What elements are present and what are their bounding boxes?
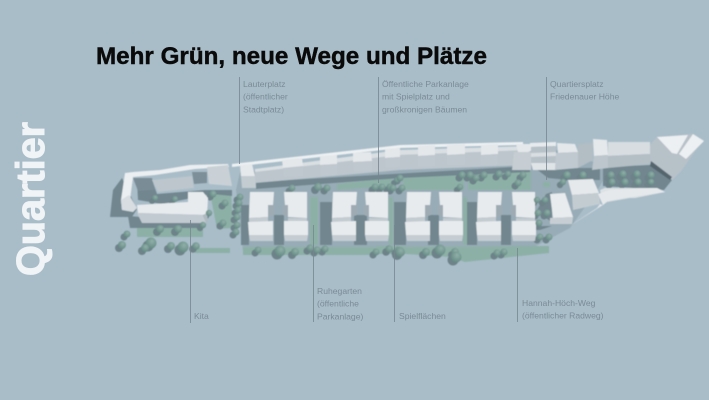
building: north-west L-shaped block (121, 164, 232, 212)
building: long northern row (232, 139, 650, 188)
label: Ruhegarten: Ruhegarten (317, 286, 362, 296)
leader lines (190, 77, 546, 323)
building: Kita block (137, 192, 208, 223)
label: Ruhegarten: (öffentliche (317, 299, 359, 309)
label: Öffentliche Parkanlage: mit Spielplatz und (382, 92, 450, 102)
label: Quartiersplatz: Quartiersplatz (550, 79, 604, 89)
site model (110, 134, 704, 266)
tree shadows (115, 173, 652, 266)
label: Lauterplatz: (öffentlicher (243, 92, 288, 102)
buildings: eight residential blocks (248, 192, 536, 241)
label: Lauterplatz: Lauterplatz (243, 79, 286, 89)
label: Hannah-Höch-Weg: (öffentlicher Radweg) (522, 311, 604, 321)
title: Mehr Grün, neue Wege und Plätze (96, 43, 487, 70)
building: east corner block (650, 134, 704, 180)
label: Quartiersplatz: Friedenauer Höhe (550, 92, 619, 102)
label: Lauterplatz: Stadtplatz) (243, 104, 284, 114)
trees (118, 170, 655, 262)
label: Kita: Kita (194, 311, 209, 321)
section label: Quartier: Quartier (9, 122, 53, 276)
label: Öffentliche Parkanlage: Öffentliche Parkanlage (382, 79, 469, 89)
building: Friedenauer Höhe square blocks (550, 179, 665, 227)
paths and green spaces (137, 150, 610, 262)
label: Hannah-Höch-Weg: Hannah-Höch-Weg (522, 298, 595, 308)
label: Ruhegarten: Parkanlage) (317, 311, 363, 321)
label: Spielflächen: Spielflächen (399, 311, 446, 321)
label: Öffentliche Parkanlage: großkronigen Bäumen (382, 104, 467, 114)
shadows of buildings (110, 165, 672, 245)
